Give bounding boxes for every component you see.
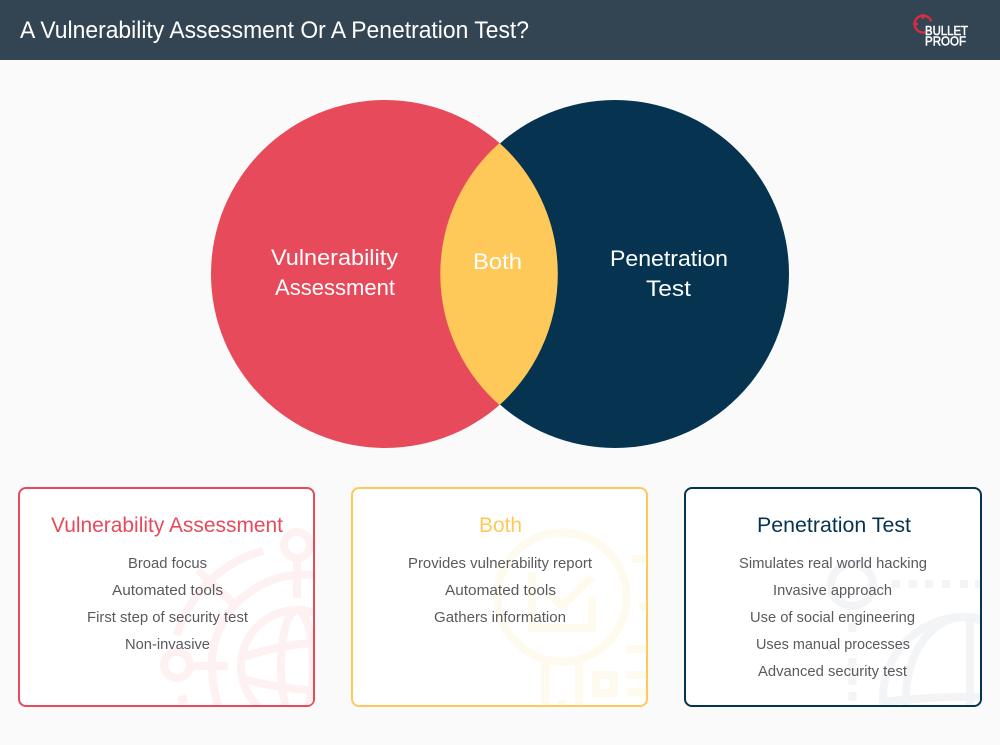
circle: vulnerability assessment [211, 100, 559, 448]
label: vulnerability assessment [271, 245, 398, 300]
heading: Penetration Test [757, 514, 911, 537]
heading: Both [479, 514, 522, 537]
list: Provides vulnerability report [408, 555, 593, 572]
list: Use of social engineering [750, 609, 915, 626]
label: penetration test: Test [646, 276, 691, 301]
label: penetration test: Penetration [610, 246, 728, 271]
panel: penetration test [684, 487, 982, 707]
logo: Bullet Proof: BULLET [925, 24, 968, 38]
panel: vulnerability assessment [18, 487, 315, 707]
list [87, 555, 249, 653]
list: Non-invasive [125, 636, 210, 653]
venn diagram [211, 100, 789, 448]
list: Uses manual processes [756, 636, 910, 653]
label: penetration test [610, 246, 728, 301]
list [739, 555, 927, 680]
header bar [0, 0, 1000, 60]
list: First step of security test [87, 609, 249, 626]
heading: Vulnerability Assessment [51, 514, 283, 537]
overlap: both [441, 144, 557, 404]
list: Automated tools [445, 582, 556, 599]
panel: both [352, 488, 650, 710]
list: Advanced security test [758, 663, 908, 680]
watermark icon: globe network [160, 528, 313, 705]
list: Simulates real world hacking [739, 555, 927, 572]
label: both: Both [473, 249, 522, 274]
list: Invasive approach [773, 582, 892, 599]
logo: Bullet Proof: PROOF [925, 34, 966, 48]
title: A Vulnerability Assessment Or A Penetration Test? [20, 17, 529, 44]
list: Automated tools [112, 582, 223, 599]
circle: penetration test [441, 100, 789, 448]
label: vulnerability assessment: Vulnerability [271, 245, 398, 270]
list [408, 555, 593, 626]
logo: Bullet Proof [913, 14, 968, 48]
label: vulnerability assessment: Assessment [275, 275, 395, 300]
watermark icon: globe with target [827, 560, 980, 705]
list: Broad focus [128, 555, 207, 572]
list: Gathers information [434, 609, 566, 626]
watermark icon: magnifier with check [498, 532, 650, 710]
